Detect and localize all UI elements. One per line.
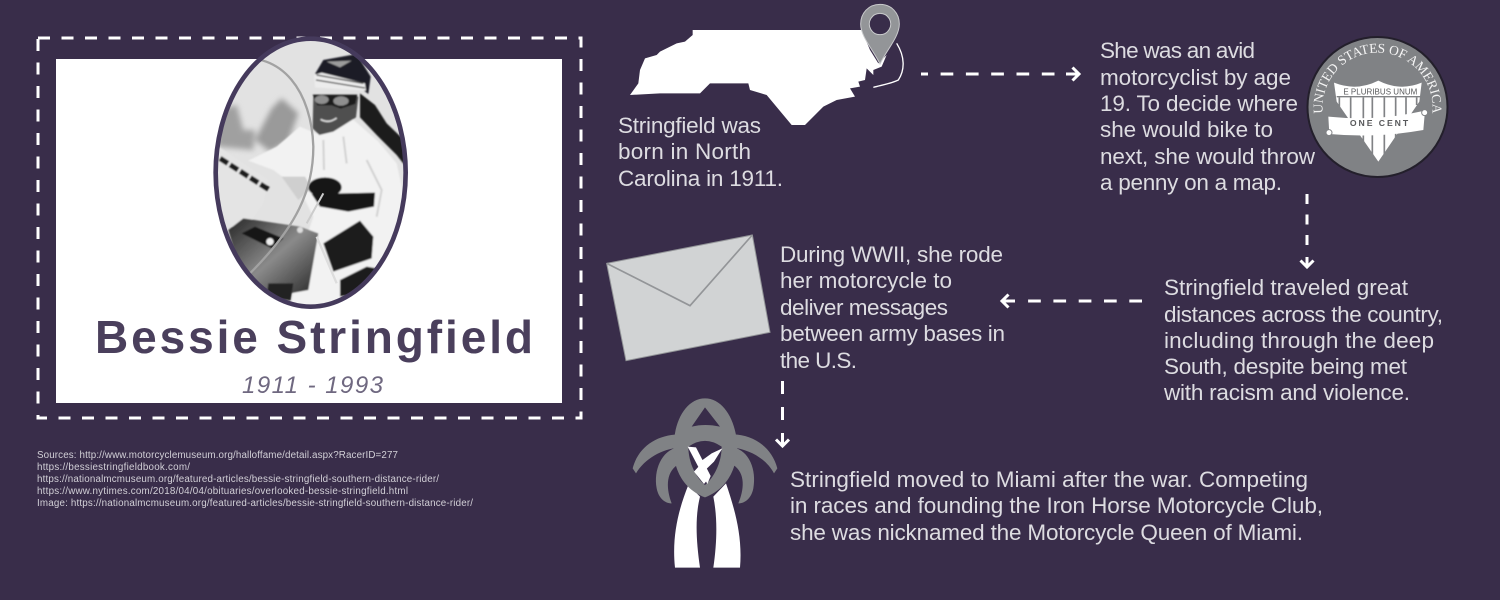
text: avid motorcyclist: She was an avid xyxy=(1100,38,1255,63)
text: travels across the country: distances across the country, xyxy=(1164,302,1443,327)
arrow: penny to travels xyxy=(1300,194,1314,267)
text: Miami: she was nicknamed the Motorcycle Queen of Miami. xyxy=(790,520,1303,545)
life dates: 1911 - 1993 xyxy=(242,372,384,399)
sources text block: Sources: http://www.motorcyclemuseum.org/halloffame/detail.aspx?RacerID=277 xyxy=(37,450,398,461)
text: travels across the country xyxy=(1163,275,1443,405)
text: born in North Carolina: born in North xyxy=(618,139,751,164)
text: avid motorcyclist: motorcyclist by age xyxy=(1100,65,1291,90)
text: avid motorcyclist: she would bike to xyxy=(1100,117,1273,142)
sources text block xyxy=(37,450,473,509)
arrow: map to penny xyxy=(921,68,1079,80)
text: WWII messages: the U.S. xyxy=(780,348,857,373)
text: WWII messages: During WWII, she rode xyxy=(780,242,1003,267)
sources text block: https://bessiestringfieldbook.com/ xyxy=(37,462,190,473)
text: born in North Carolina: Stringfield was xyxy=(618,113,761,138)
text: travels across the country: Stringfield traveled great xyxy=(1164,275,1409,300)
penny shield: ONE CENT xyxy=(1350,118,1409,128)
title: Bessie Stringfield xyxy=(95,311,533,363)
white card xyxy=(56,59,562,403)
penny shield: E PLURIBUS UNUM xyxy=(1343,88,1417,97)
dashed frame xyxy=(38,38,581,418)
text: WWII messages: between army bases in xyxy=(780,321,1005,346)
text: WWII messages xyxy=(780,242,1005,373)
text: travels across the country: with racism and violence. xyxy=(1163,380,1410,405)
portrait photo of Bessie Stringfield xyxy=(213,37,410,310)
penny legend: UNITED STATES OF AMERICA xyxy=(1314,44,1442,114)
icon: penny xyxy=(1306,36,1448,178)
text: born in North Carolina: Carolina in 1911. xyxy=(618,166,783,191)
arrow: travels to WWII xyxy=(1002,294,1142,308)
panel: portrait card xyxy=(38,37,581,418)
text: Miami xyxy=(790,467,1323,545)
text: travels across the country: South, despite being met xyxy=(1164,354,1408,379)
icon: North Carolina map with pin xyxy=(630,4,903,125)
icon: envelope xyxy=(607,235,770,361)
penny shield xyxy=(1326,81,1428,162)
text: avid motorcyclist: next, she would throw xyxy=(1100,144,1316,169)
text: WWII messages: her motorcycle to xyxy=(780,268,952,293)
sources text block: Image: https://nationalmcmuseum.org/featured-articles/bessie-stringfield-southern-distance-rider/ xyxy=(37,498,473,509)
text: travels across the country: including through the deep xyxy=(1164,328,1434,353)
text: Miami: Stringfield moved to Miami after the war. Competing xyxy=(790,467,1308,492)
arrow: WWII to Miami xyxy=(776,381,789,446)
text: avid motorcyclist: a penny on a map. xyxy=(1100,170,1282,195)
text: born in North Carolina xyxy=(618,113,783,191)
sources text block: https://www.nytimes.com/2018/04/04/obituaries/overlooked-bessie-stringfield.html xyxy=(37,486,408,497)
icon: palm tree xyxy=(633,398,777,568)
text: avid motorcyclist: 19. To decide where xyxy=(1100,91,1298,116)
text: avid motorcyclist xyxy=(1100,38,1316,195)
text: Miami: in races and founding the Iron Horse Motorcycle Club, xyxy=(790,493,1323,518)
sources text block: https://nationalmcmuseum.org/featured-articles/bessie-stringfield-southern-distance-rider/ xyxy=(37,474,439,485)
text: WWII messages: deliver messages xyxy=(780,295,948,320)
